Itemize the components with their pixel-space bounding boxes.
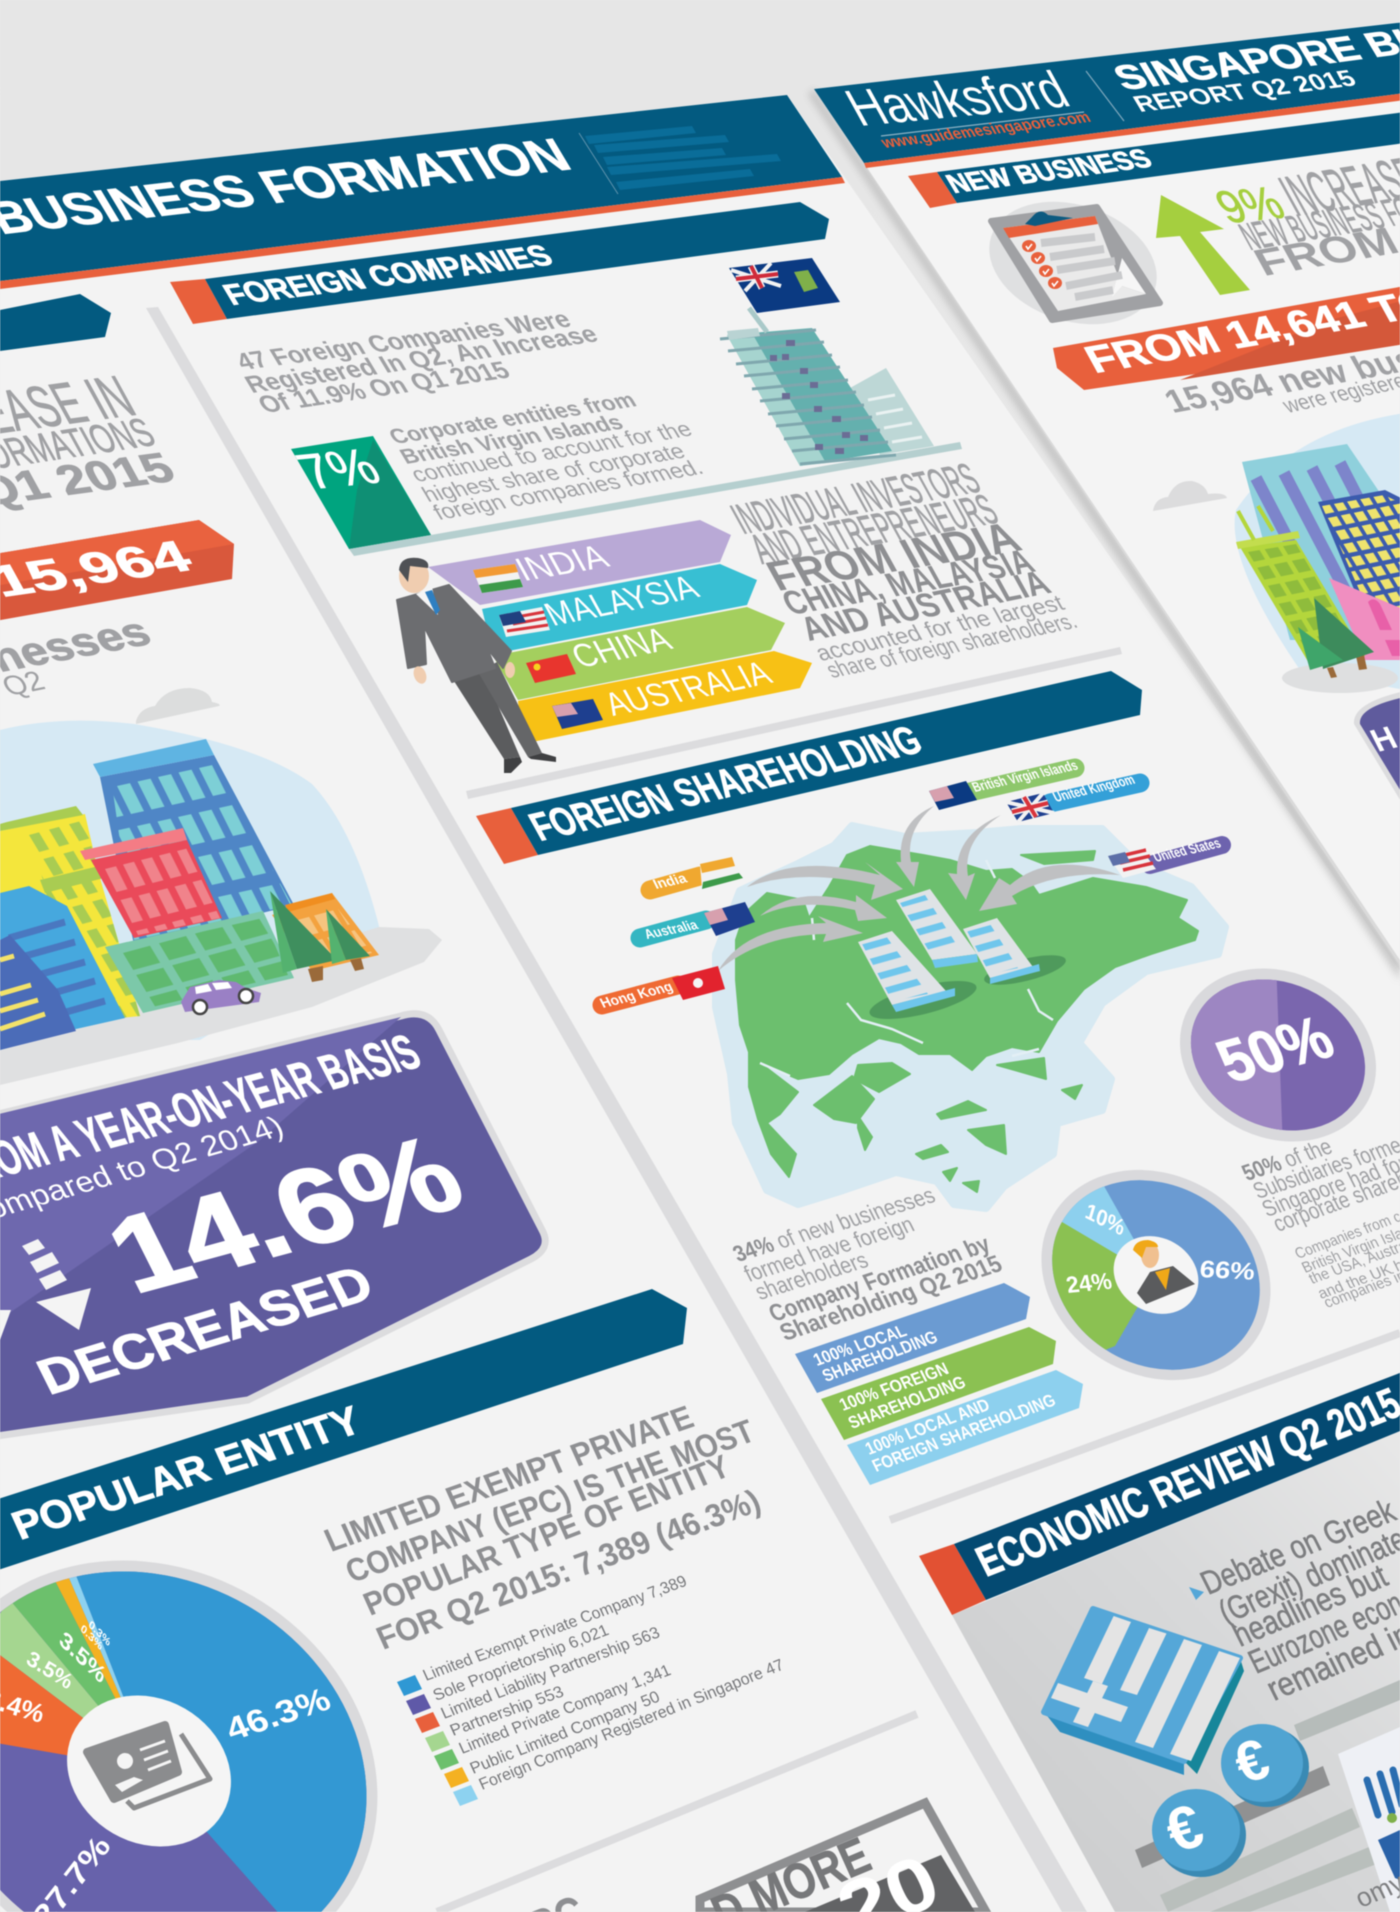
- label: hong kong: [597, 966, 725, 1011]
- shareholding arrow labels: FOREIGN SHAREHOLDING: [869, 1390, 1059, 1476]
- section bar: foreign shareholding: FOREIGN SHAREHOLDING: [522, 718, 930, 849]
- banner: 15,964: [0, 520, 234, 621]
- header band: business formation: [0, 95, 845, 289]
- header band: hawksford: [814, 0, 1400, 168]
- header band: hawksford: REPORT Q2 2015: [1128, 66, 1361, 118]
- text: individual investors: FROM INDIA: [759, 514, 1029, 600]
- text: limited exempt private company headline: FOR Q2 2015: 7,389 (46.3%): [371, 1483, 766, 1656]
- icon: map towers: [858, 889, 1068, 1027]
- text: corporate entities: foreign companies formed.: [428, 455, 708, 525]
- country arrows: india malaysia china australia: INDIA: [509, 539, 616, 588]
- legend: entity types: Partnership 553: [447, 1683, 567, 1740]
- text: 34% of new businesses: formed have foreign: [739, 1211, 918, 1287]
- section bar: popular entity: [0, 1289, 687, 1571]
- icon: cloud left: [136, 688, 220, 724]
- label: india: India: [650, 870, 690, 892]
- shareholding arrow labels: 100% LOCAL AND: [862, 1394, 993, 1459]
- callout: year-on-year decrease: [0, 1014, 545, 1437]
- legend: entity types: Limited Exempt Private Company 7,389: [420, 1572, 690, 1685]
- headline: increase in formations: [0, 363, 183, 515]
- stat: 50% circle: [1180, 968, 1376, 1142]
- country arrows: india malaysia china australia: CHINA: [565, 621, 679, 675]
- text: individual investors: AND AUSTRALIA: [794, 564, 1057, 648]
- text: 47 foreign companies: Of 11.9% On Q1 2015: [253, 357, 515, 418]
- text: corporate entities: [384, 388, 708, 525]
- text: 47 foreign companies: [231, 306, 603, 418]
- illustration: city skyline: [0, 721, 442, 1085]
- legend: entity types: [397, 1572, 787, 1806]
- icon: green up arrow: [1156, 195, 1250, 295]
- icon: businessman bust: [1133, 1240, 1195, 1304]
- shelf line: [349, 442, 962, 556]
- pie chart: entity types: 3.5%: [23, 1646, 77, 1694]
- text: limited exempt private company headline: [319, 1399, 766, 1656]
- label: india: [650, 857, 743, 892]
- legend: entity types: Foreign Company Registered in Singapore 47: [476, 1656, 787, 1794]
- icon: china flag: [526, 654, 576, 683]
- section bar: economic review: [919, 1371, 1400, 1615]
- text: corporate entities: highest share of corporate: [417, 439, 690, 507]
- legend: entity types: Limited Liability Partnership 563: [438, 1624, 663, 1723]
- text: 50% of subsidiaries: 50% of the: [1237, 1133, 1336, 1186]
- illustration: teal tower with flag: [720, 258, 934, 466]
- background bars: economic review: [1135, 1680, 1400, 1912]
- text: individual investors: accounted for the largest: [810, 590, 1069, 666]
- illustration: businessman: [397, 558, 556, 773]
- stat: 7% box: [287, 436, 431, 549]
- text: 47 foreign companies: 47 Foreign Companies Were: [231, 306, 576, 376]
- sheet shadow: right poster: [808, 89, 1400, 980]
- label: united kingdom: [1006, 771, 1140, 822]
- section bar: new business: NEW BUSINESS: [940, 143, 1157, 199]
- icon: small tree: [326, 909, 370, 971]
- legend: entity types: Public Limited Company 50: [467, 1688, 663, 1778]
- country arrows: india malaysia china australia: MALAYSIA: [538, 569, 706, 633]
- text: 50% of subsidiaries: [1237, 1122, 1400, 1312]
- pie chart: entity types: 0.3%: [79, 1623, 104, 1653]
- section bar: foreign companies: [170, 202, 829, 324]
- illustration: city skyline right: [1235, 413, 1400, 693]
- heading: company formation by shareholding: Shareholding Q2 2015: [775, 1250, 1007, 1347]
- icon: greek flag: [1044, 1609, 1244, 1775]
- section bar: foreign shareholding: [476, 671, 1142, 864]
- text: corporate entities: continued to account for the: [406, 417, 697, 487]
- shareholding arrow labels: 100% LOCAL: [810, 1320, 910, 1370]
- icon: euro coins: €: [1157, 1791, 1212, 1865]
- column divider: [146, 307, 1087, 1912]
- text: 34% of new businesses: [728, 1182, 939, 1305]
- text: 47 foreign companies: Registered In Q2, An Increase: [240, 321, 603, 398]
- read more box: [700, 1803, 986, 1912]
- text: 34% of new businesses: 34% of new businesses: [728, 1182, 939, 1267]
- legend: entity types: Limited Private Company 1,341: [456, 1661, 674, 1758]
- stat: 50% circle: 50%: [1205, 1003, 1344, 1095]
- icon: euro coins: [1152, 1724, 1309, 1877]
- icon: down arrow: [0, 1239, 91, 1340]
- pie chart: shareholding: 10%: [1083, 1198, 1128, 1241]
- text: individual investors: share of foreign shareholders.: [821, 608, 1082, 683]
- label: united states: United States: [1150, 835, 1224, 865]
- callout: year-on-year decrease: DECREASED: [28, 1255, 382, 1405]
- icon: purple car: [181, 980, 261, 1014]
- text: new businesses: [0, 609, 159, 702]
- label: british virgin islands: [929, 757, 1081, 810]
- text: individual investors: CHINA, MALAYSIA: [776, 543, 1041, 622]
- text: individual investors: INDIVIDUAL INVESTORS: [724, 456, 988, 543]
- heading: company formation by shareholding: Company Formation by: [764, 1231, 995, 1328]
- text: limited exempt private company headline: LIMITED EXEMPT PRIVATE: [319, 1399, 699, 1558]
- icon: malaysia flag: [499, 607, 550, 637]
- section bar: new business: [908, 112, 1400, 208]
- divider above foreign shareholding: [466, 647, 1122, 799]
- pie chart: entity types: 3.5%: [56, 1626, 110, 1689]
- shareholding arrow labels: 100% FOREIGN: [836, 1358, 952, 1415]
- icon: clipboard: [973, 181, 1173, 345]
- section bar: popular entity: POPULAR ENTITY: [5, 1398, 368, 1548]
- shareholding arrow labels: [795, 1283, 1083, 1485]
- text: debate on greek exit: [1189, 1492, 1400, 1708]
- illustration: economy chart: [1338, 1727, 1400, 1912]
- icon: euro coins: €: [1226, 1727, 1277, 1796]
- text: individual investors: AND ENTREPRENEURS: [743, 487, 1006, 573]
- arrows to singapore: [718, 806, 1120, 971]
- headline: 9% increase in new business: 9%: [1207, 178, 1294, 233]
- country arrows: india malaysia china australia: [428, 520, 812, 744]
- icon: big tree: [270, 891, 337, 982]
- text: limited exempt private company headline: COMPANY (EPC) IS THE MOST: [340, 1413, 760, 1589]
- headline: 9% increase in new business: [1207, 146, 1400, 284]
- section bar: new business left stub: [0, 294, 111, 351]
- icon: india flag: [473, 564, 523, 593]
- pie chart: entity types: [0, 1560, 378, 1912]
- pie chart: shareholding: 24%: [1064, 1268, 1114, 1298]
- text: corporate entities: British Virgin Islands: [395, 410, 628, 469]
- logo: hawksford: www.guidemesingapore.com: [877, 109, 1094, 152]
- callout: year-on-year decrease: 14.6%: [89, 1112, 481, 1315]
- bottom dividers: [437, 1714, 917, 1912]
- pie chart: entity types: 0.3%: [87, 1619, 112, 1649]
- legend: entity types: Sole Proprietorship 6,021: [430, 1621, 612, 1705]
- text: individual investors: [724, 456, 1082, 683]
- icon: cloud right: [1153, 481, 1227, 511]
- icon: australia flag: [552, 699, 603, 729]
- text: corporate entities: Corporate entities from: [384, 388, 641, 449]
- label: british virgin islands: British Virgin Islands: [969, 757, 1081, 795]
- label: united kingdom: United Kingdom: [1050, 771, 1137, 805]
- label: hong kong: Hong Kong: [597, 978, 675, 1011]
- text: 34% of new businesses: shareholders: [750, 1247, 872, 1305]
- section bar: foreign companies: FOREIGN COMPANIES: [217, 239, 559, 311]
- callout: purple box right: [1354, 691, 1400, 808]
- country arrows: india malaysia china australia: AUSTRALIA: [598, 655, 779, 723]
- stat: 7% box: 7%: [287, 439, 390, 500]
- sheet: right poster: [814, 22, 1400, 962]
- shareholding arrow labels: SHAREHOLDING: [845, 1372, 969, 1433]
- icon: british virgin islands flag: [729, 258, 840, 313]
- label: australia: [640, 902, 755, 942]
- label: australia: Australia: [641, 916, 701, 942]
- logo: hawksford: Hawksford: [835, 61, 1079, 137]
- pie chart: entity types: 46.3%: [220, 1681, 336, 1748]
- pie chart: shareholding: [1041, 1170, 1271, 1380]
- shareholding arrow labels: SHAREHOLDING: [819, 1327, 941, 1386]
- label: united states: [1108, 835, 1224, 878]
- text: limited exempt private company headline: POPULAR TYPE OF ENTITY: [358, 1448, 735, 1622]
- panel: economic review background: [952, 1431, 1400, 1912]
- icon: id card: [87, 1725, 210, 1808]
- pie chart: shareholding: 66%: [1198, 1256, 1256, 1286]
- map: singapore: [716, 806, 1225, 1208]
